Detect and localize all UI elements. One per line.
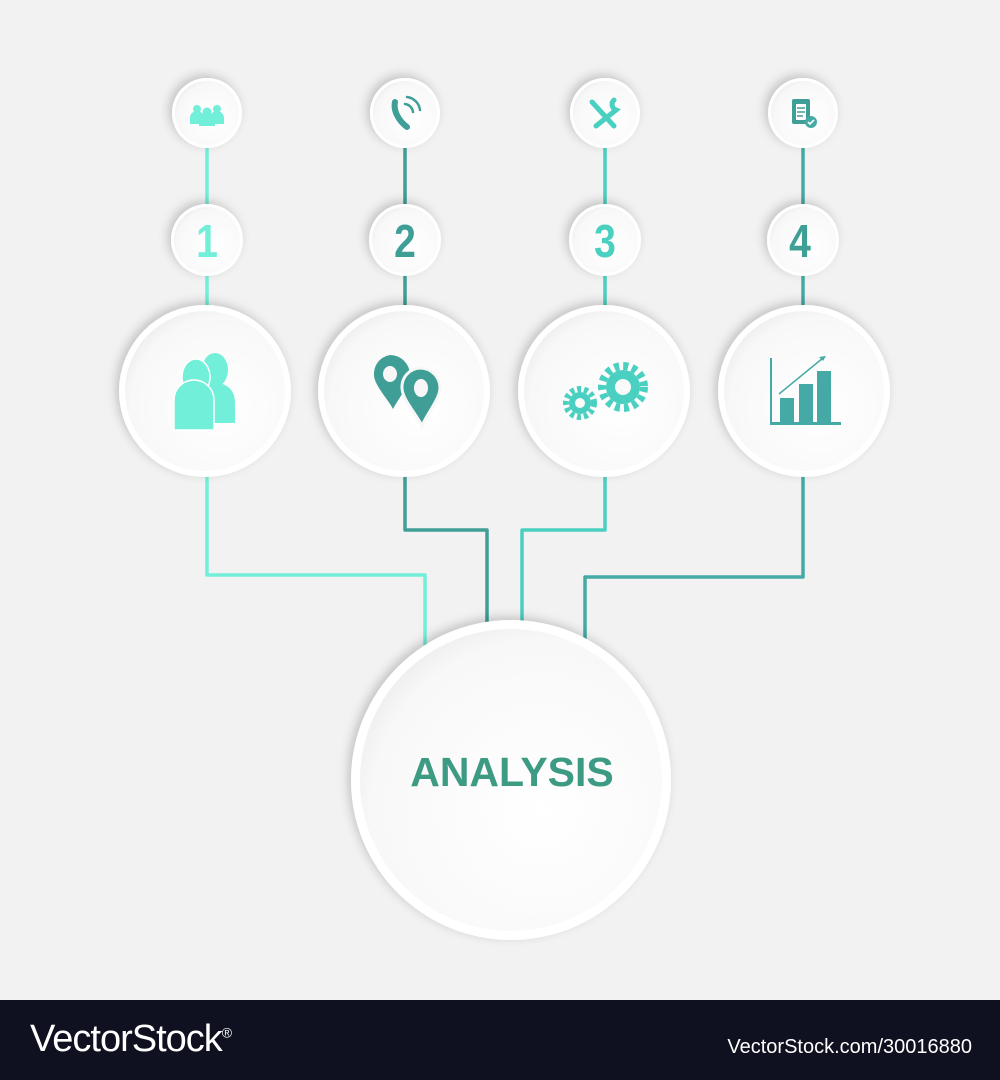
numbers: 2 [394, 216, 416, 268]
connector lines [207, 148, 803, 645]
number circles [171, 204, 839, 276]
footer brand: VectorStock® [30, 1018, 231, 1060]
numbers: 4 [789, 216, 811, 268]
center circle [351, 620, 671, 940]
icon: bar chart [770, 356, 841, 425]
icon: group [190, 105, 224, 126]
icon: people [174, 353, 235, 430]
numbers [196, 216, 811, 268]
icon: map pins [374, 355, 440, 426]
numbers: 1 [196, 216, 218, 268]
footer url: VectorStock.com/30016880 [727, 1036, 972, 1058]
title: ANALYSIS: ANALYSIS [410, 749, 614, 795]
icon: tools [592, 100, 616, 126]
numbers: 3 [594, 216, 616, 268]
small icon circles [172, 78, 838, 148]
icon: gears [566, 366, 644, 417]
footer bar [0, 1000, 1000, 1080]
big circles [119, 305, 890, 477]
icon: clipboard [792, 99, 817, 128]
icon: phone [395, 97, 420, 127]
